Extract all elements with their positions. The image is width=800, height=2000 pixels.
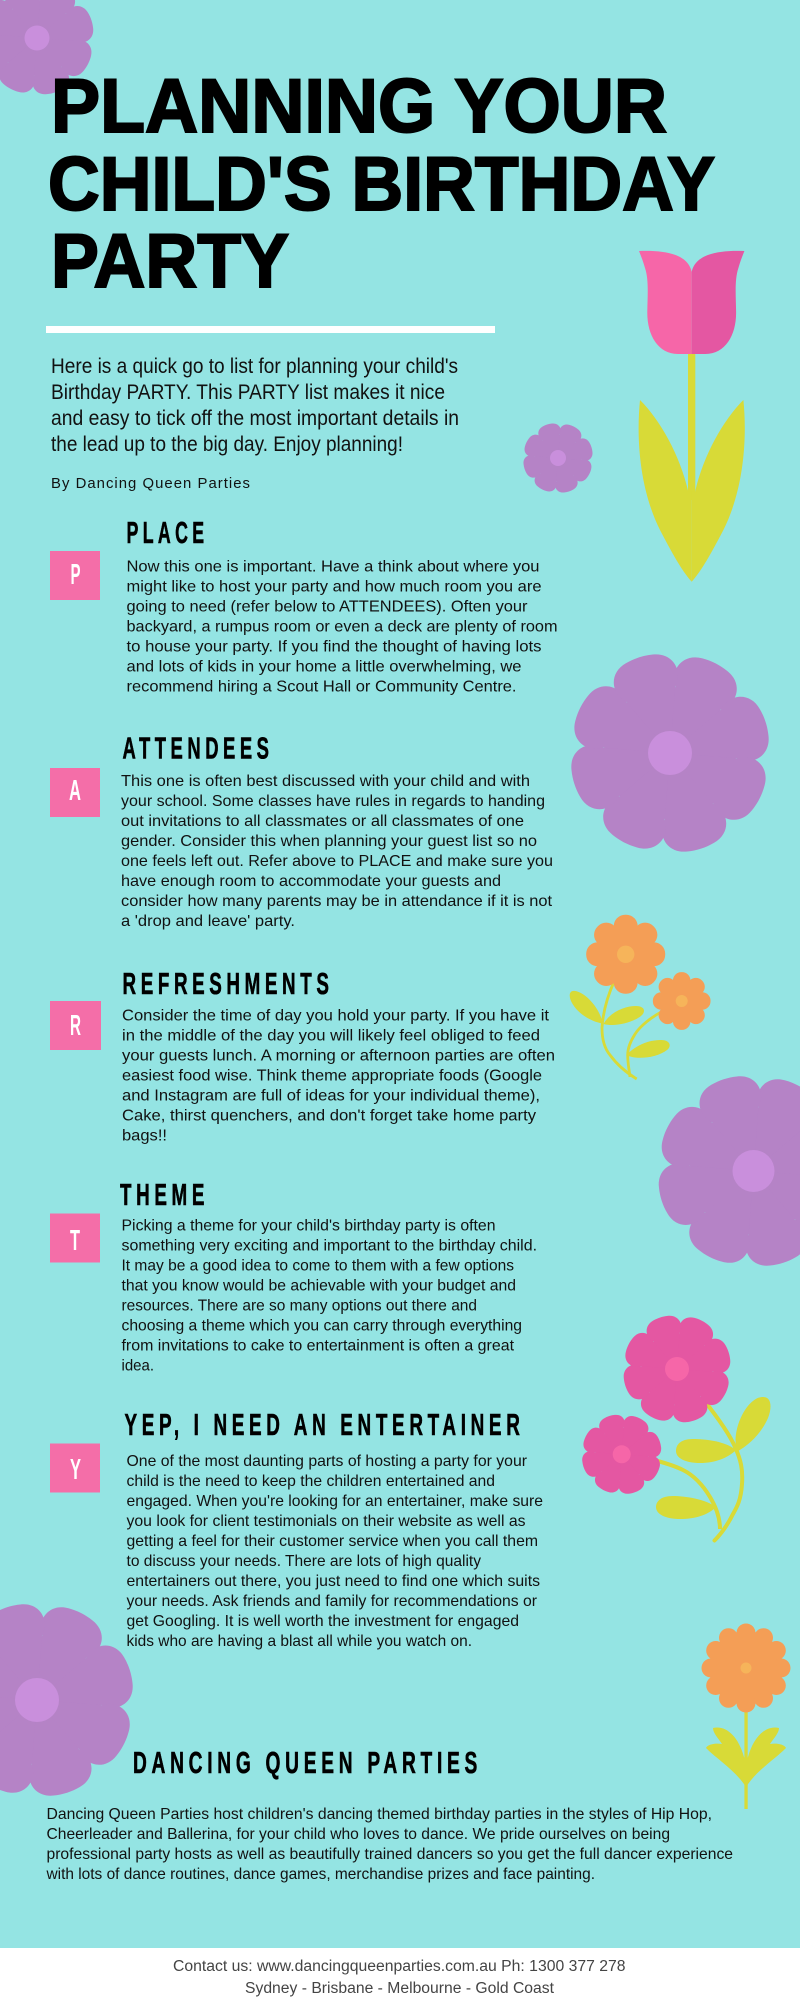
icon: orange flowers	[570, 915, 711, 1079]
heading: place: PLACE	[126, 516, 208, 550]
text: attendees body: your school. Some classes have rules in regards to handing	[121, 793, 545, 810]
text: about: Dancing Queen Parties host children's dancing themed birthday parties in the styles of Hip Hop,	[46, 1806, 712, 1823]
text: place body: Now this one is important. Have a think about where you	[126, 558, 540, 576]
title	[48, 64, 715, 304]
text: refreshments body	[122, 1008, 555, 1144]
title: PLANNING YOUR	[51, 64, 667, 149]
text: entertainer body: getting a feel for their customer service when you call them	[126, 1533, 538, 1550]
text: refreshments body: and Instagram are full of ideas for your individual theme),	[122, 1088, 540, 1104]
text: place body: to house your party. If you find the thought of having lots	[126, 638, 542, 656]
text: theme body: that you know would be achievable with your budget and	[122, 1278, 516, 1294]
icon: purple flower top left	[0, 0, 97, 98]
icon: large purple flower	[564, 647, 776, 859]
text: refreshments body: in the middle of the day you will likely feel obliged to feed	[122, 1028, 540, 1044]
text: theme body: from invitations to cake to entertainment is often a great	[122, 1338, 515, 1354]
badge: T	[50, 1214, 100, 1262]
badge: P	[50, 551, 100, 600]
text: entertainer body: kids who are having a blast all while you watch on.	[126, 1633, 472, 1650]
text: theme body: resources. There are so many options out there and	[122, 1298, 477, 1314]
text: entertainer body: you look for client testimonials on their website as well as	[126, 1513, 526, 1530]
panel: attendees	[50, 732, 553, 930]
text: place body: might like to host your party and how much room you are	[126, 578, 542, 596]
footer: Sydney - Brisbane - Melbourne - Gold Coast	[245, 1980, 555, 1997]
badge: R: R	[70, 1010, 81, 1042]
text: theme body: It may be a good idea to come to them with a few options	[122, 1258, 514, 1274]
badge: R	[50, 1001, 101, 1050]
panel: yep, i need an entertainer	[50, 1408, 543, 1650]
badge: A	[50, 768, 100, 817]
badge: P: P	[70, 559, 80, 591]
heading: refreshments: REFRESHMENTS	[122, 967, 334, 1001]
intro text	[51, 355, 459, 456]
heading: entertainer: YEP, I NEED AN ENTERTAINER	[124, 1408, 524, 1442]
text: about: professional party hosts as well as beautifully trained dancers so you get the full dancer experience	[46, 1846, 733, 1863]
text: refreshments body: Cake, thirst quenchers, and don't forget take home party	[122, 1108, 536, 1124]
text: theme body: idea.	[122, 1358, 154, 1374]
text: theme body	[122, 1218, 537, 1374]
text: attendees body: a 'drop and leave' party.	[121, 913, 295, 930]
intro text: the lead up to the big day. Enjoy planning!	[51, 433, 403, 456]
intro text: Here is a quick go to list for planning your child's	[51, 355, 458, 378]
intro text: Birthday PARTY. This PARTY list makes it nice	[51, 381, 445, 404]
icon: tulip	[639, 251, 745, 582]
icon: purple flower bottom left	[0, 1597, 140, 1803]
text: theme body: choosing a theme which you can carry through everything	[122, 1318, 522, 1334]
text: place body	[126, 558, 558, 696]
badge: Y	[50, 1444, 100, 1492]
text: refreshments body: easiest food wise. Think theme appropriate foods (Google	[122, 1068, 542, 1084]
badge: T: T	[70, 1225, 80, 1257]
panel: dancing queen parties	[46, 1746, 733, 1883]
badge: A: A	[69, 775, 81, 807]
title: CHILD'S BIRTHDAY	[48, 142, 715, 227]
panel: refreshments	[50, 967, 555, 1144]
text: place body: and lots of kids in your home a little overwhelming, we	[126, 658, 522, 676]
text: refreshments body: Consider the time of day you hold your party. If you have it	[122, 1008, 550, 1024]
heading: theme: THEME	[120, 1178, 209, 1212]
panel: theme	[50, 1178, 537, 1374]
text: place body: going to need (refer below to ATTENDEES). Often your	[126, 598, 528, 616]
text: attendees body: out invitations to all classmates or all classmates of one	[121, 813, 524, 830]
text: entertainer body: child is the need to keep the children entertained and	[126, 1473, 495, 1490]
text: about: with lots of dance routines, dance games, merchandise prizes and face painting.	[46, 1866, 595, 1883]
byline: By Dancing Queen Parties	[51, 476, 251, 492]
text: entertainer body: to discuss your needs. There are lots of high quality	[126, 1553, 481, 1570]
text: entertainer body: your needs. Ask friends and family for recommendations or	[126, 1593, 538, 1610]
text: entertainer body	[126, 1453, 543, 1650]
text: refreshments body: your guests lunch. A morning or afternoon parties are often	[122, 1048, 555, 1064]
icon: small purple flower	[521, 421, 595, 495]
text: place body: backyard, a rumpus room or even a deck are plenty of room	[126, 618, 558, 636]
heading: dancing queen parties: DANCING QUEEN PARTIES	[133, 1746, 482, 1780]
text: theme body: Picking a theme for your child's birthday party is often	[122, 1218, 496, 1234]
badge: Y: Y	[70, 1454, 81, 1486]
text: attendees body: gender. Consider this when planning your guest list so no	[121, 833, 537, 850]
icon: purple flower right	[652, 1070, 800, 1272]
text: theme body: something very exciting and important to the birthday child.	[122, 1238, 537, 1254]
text: attendees body: one feels left out. Refer above to PLACE and make sure you	[121, 853, 553, 870]
text: entertainer body: get Googling. It is well worth the investment for engaged	[126, 1613, 519, 1630]
panel: place	[50, 516, 558, 696]
text: entertainer body: entertainers out there, you just need to find one which suits	[126, 1573, 540, 1590]
text: attendees body	[121, 773, 553, 930]
heading: attendees: ATTENDEES	[122, 732, 274, 766]
intro text: and easy to tick off the most important details in	[51, 407, 459, 430]
title: PARTY	[51, 219, 289, 304]
text: attendees body: This one is often best discussed with your child and with	[121, 773, 530, 790]
text: attendees body: have enough room to accommodate your guests and	[121, 873, 501, 890]
text: entertainer body: engaged. When you're looking for an entertainer, make sure	[126, 1493, 543, 1510]
text: about	[46, 1806, 733, 1883]
text: attendees body: consider how many parents may be in attendance if it is not	[121, 893, 553, 910]
icon: orange flower with stem	[702, 1624, 790, 1809]
icon: pink flowers	[579, 1312, 770, 1540]
text: entertainer body: One of the most daunting parts of hosting a party for your	[126, 1453, 528, 1470]
text: place body: recommend hiring a Scout Hall or Community Centre.	[126, 678, 516, 696]
text: about: Cheerleader and Ballerina, for your child who loves to dance. We pride ourselves on being	[46, 1826, 670, 1843]
footer	[0, 1948, 800, 2000]
text: refreshments body: bags!!	[122, 1128, 167, 1144]
footer: Contact us: www.dancingqueenparties.com.au Ph: 1300 377 278	[173, 1958, 626, 1975]
